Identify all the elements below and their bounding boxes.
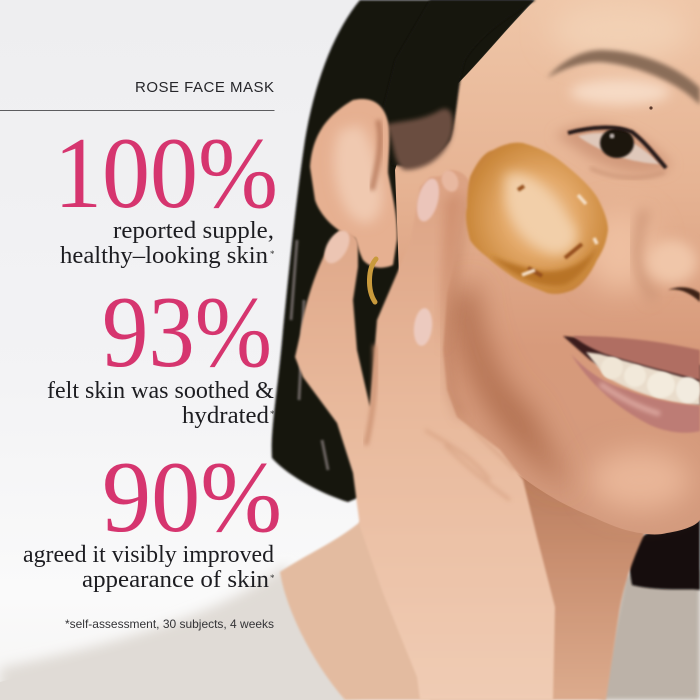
heading rule	[0, 110, 274, 111]
stat caption: 90%: *	[270, 573, 275, 583]
eye: lower lid crease	[590, 168, 665, 178]
eye	[555, 125, 672, 178]
ear: rim shadow	[372, 120, 380, 190]
eye: socket shade	[555, 125, 672, 174]
stat caption: 90%: agreed it visibly improved	[23, 541, 274, 568]
nose: tip highlight	[647, 240, 697, 284]
shirt: right shoulder	[600, 570, 700, 700]
mouth: teeth	[586, 352, 700, 405]
stat caption: 100%: reported supple,	[113, 217, 274, 244]
face shading: chin highlight	[590, 450, 690, 510]
hand	[295, 170, 555, 700]
stat caption: 100%: *	[270, 249, 275, 259]
stat number: 100%: 100%	[54, 117, 278, 230]
stat caption: 93%: *	[270, 409, 275, 419]
mouth: upper lip	[573, 336, 700, 380]
eyebrow	[547, 50, 700, 105]
mouth: tooth three	[647, 372, 675, 398]
patch: gel highlights	[522, 195, 597, 275]
forehead mole	[649, 106, 653, 110]
fingernail: little finger	[322, 230, 350, 264]
neck	[431, 473, 646, 700]
rose mask patch	[466, 143, 608, 294]
stat block: 100%	[54, 117, 278, 269]
face shading: brow-bone glow	[570, 79, 670, 105]
stat caption: 100%: healthy–looking skin	[60, 242, 268, 269]
stat block: 93%	[47, 276, 275, 429]
hand: fingertip shade	[440, 194, 462, 309]
mouth: lower lip sheen	[600, 384, 660, 414]
face	[395, 0, 700, 534]
heading: rose face mask: ROSE FACE MASK	[135, 79, 274, 96]
mouth: tooth one	[601, 357, 623, 379]
face shading: cheek highlight	[585, 210, 655, 290]
earring	[369, 259, 376, 302]
stat number: 93%: 93%	[102, 276, 272, 389]
patch: dark amber lower edge	[490, 245, 598, 286]
hair: back left	[272, 0, 535, 502]
mouth: tooth four	[676, 377, 700, 403]
stat number: 90%: 90%	[102, 441, 282, 554]
fingernail: middle finger	[441, 170, 459, 192]
fingernail: lower finger	[413, 308, 433, 346]
stat caption: 90%: appearance of skin	[82, 566, 269, 593]
hand: finger gap shadow	[366, 345, 375, 445]
patch: petal flecks	[518, 186, 582, 276]
stat caption: 90%	[23, 541, 275, 593]
nose	[637, 210, 700, 302]
ear: inner shading	[334, 125, 382, 223]
hand: knuckle crease	[426, 428, 514, 500]
mouth	[563, 336, 700, 433]
eye: upper lash line	[568, 128, 666, 168]
stat caption: 93%: felt skin was soothed &	[47, 377, 274, 404]
hair: loose strands highlight	[291, 240, 328, 470]
ear	[310, 99, 397, 268]
shoulder skin	[280, 520, 440, 700]
eye: glint	[610, 134, 614, 138]
shirt: lower left solid fill	[0, 682, 344, 700]
nose: nostril	[668, 287, 700, 302]
mouth: lower lip	[571, 354, 700, 433]
stat caption: 93%	[47, 377, 275, 429]
stat caption: 93%: hydrated	[182, 402, 269, 429]
hair: behind neck right	[625, 515, 700, 590]
hand: edge shadow against cheek	[448, 200, 468, 418]
mouth: interior	[563, 336, 700, 405]
hair: wisps in front of ear	[385, 109, 453, 170]
shirt: left shoulder	[0, 565, 296, 682]
patch: gel sheen	[505, 173, 577, 255]
eye: white	[578, 133, 660, 164]
mouth: tooth two	[624, 365, 646, 387]
hair: hairline over temple	[380, 0, 536, 166]
footnote: *self-assessment, 30 subjects, 4 weeks	[65, 617, 274, 631]
face shading: forehead glow	[558, 6, 682, 56]
face shading: jaw shadow	[450, 280, 570, 490]
nose: side shadow	[637, 210, 655, 300]
stat caption: 100%	[60, 217, 275, 269]
fingernail: index finger	[416, 178, 440, 222]
eye: iris	[600, 128, 634, 158]
stat block: 90%	[23, 441, 282, 593]
